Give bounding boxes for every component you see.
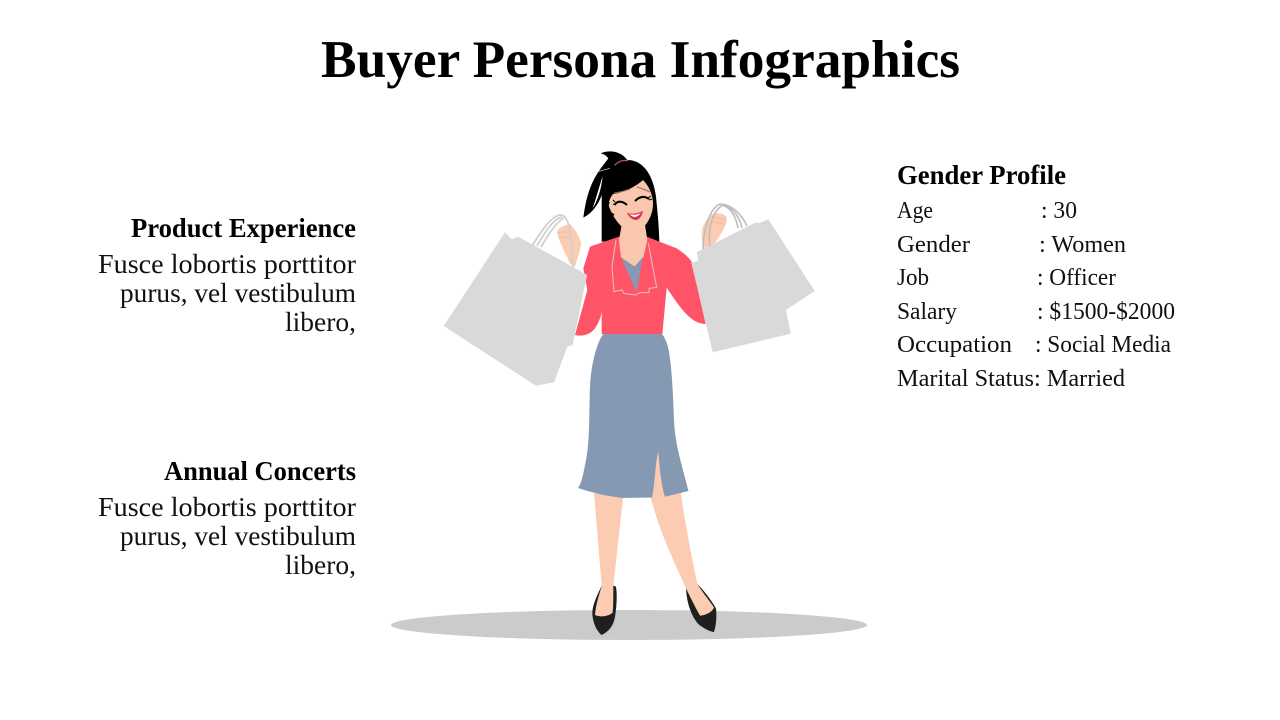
left hand: [557, 224, 581, 267]
panel: gender profile: Gender Profile: [897, 160, 1066, 190]
panel: gender profile: : $1500-$2000: [1037, 299, 1175, 325]
panel: gender profile: : Women: [1039, 232, 1126, 258]
blue top: [621, 257, 643, 293]
panel: gender profile: Job: [897, 265, 929, 291]
hair tie: [615, 160, 628, 165]
blazer: [575, 237, 706, 336]
legs and shoes: [592, 452, 716, 635]
title: Buyer Persona Infographics: [321, 31, 960, 89]
panel: gender profile: Age: [897, 198, 933, 224]
text block: annual concerts: Annual Concerts: [164, 456, 356, 486]
hair sliver: [593, 176, 603, 208]
text block: annual concerts: [98, 456, 356, 580]
right shopping bag: [691, 204, 815, 352]
panel: gender profile: [897, 160, 1175, 392]
text block: product experience: Fusce lobortis porttitor: [98, 249, 356, 279]
face: [608, 180, 653, 232]
text block: product experience: Product Experience: [131, 213, 356, 243]
illustration: woman with shopping bags: [444, 151, 815, 635]
neck and chest: [619, 225, 647, 267]
panel: gender profile: : Officer: [1037, 265, 1116, 291]
text block: annual concerts: Fusce lobortis porttitor: [98, 492, 356, 522]
left shopping bag: [444, 215, 587, 386]
panel: gender profile: Gender: [897, 232, 970, 258]
text block: product experience: libero,: [285, 307, 356, 337]
hair: [583, 151, 659, 242]
skirt: [578, 333, 688, 498]
panel: gender profile: : 30: [1041, 198, 1077, 224]
panel: gender profile: : Social Media: [1035, 332, 1171, 358]
panel: gender profile: Salary: [897, 299, 957, 325]
right hand: [702, 213, 727, 248]
text block: product experience: purus, vel vestibulum: [120, 278, 356, 308]
lapel outline: [612, 240, 657, 295]
hair highlight: [592, 168, 610, 173]
text block: product experience: [98, 213, 356, 337]
text block: annual concerts: purus, vel vestibulum: [120, 521, 356, 551]
hand creases: [558, 217, 726, 238]
text block: annual concerts: libero,: [285, 550, 356, 580]
panel: gender profile: Occupation: [897, 332, 1012, 358]
panel: gender profile: Marital Status: Married: [897, 366, 1125, 392]
ground shadow: [391, 610, 867, 640]
